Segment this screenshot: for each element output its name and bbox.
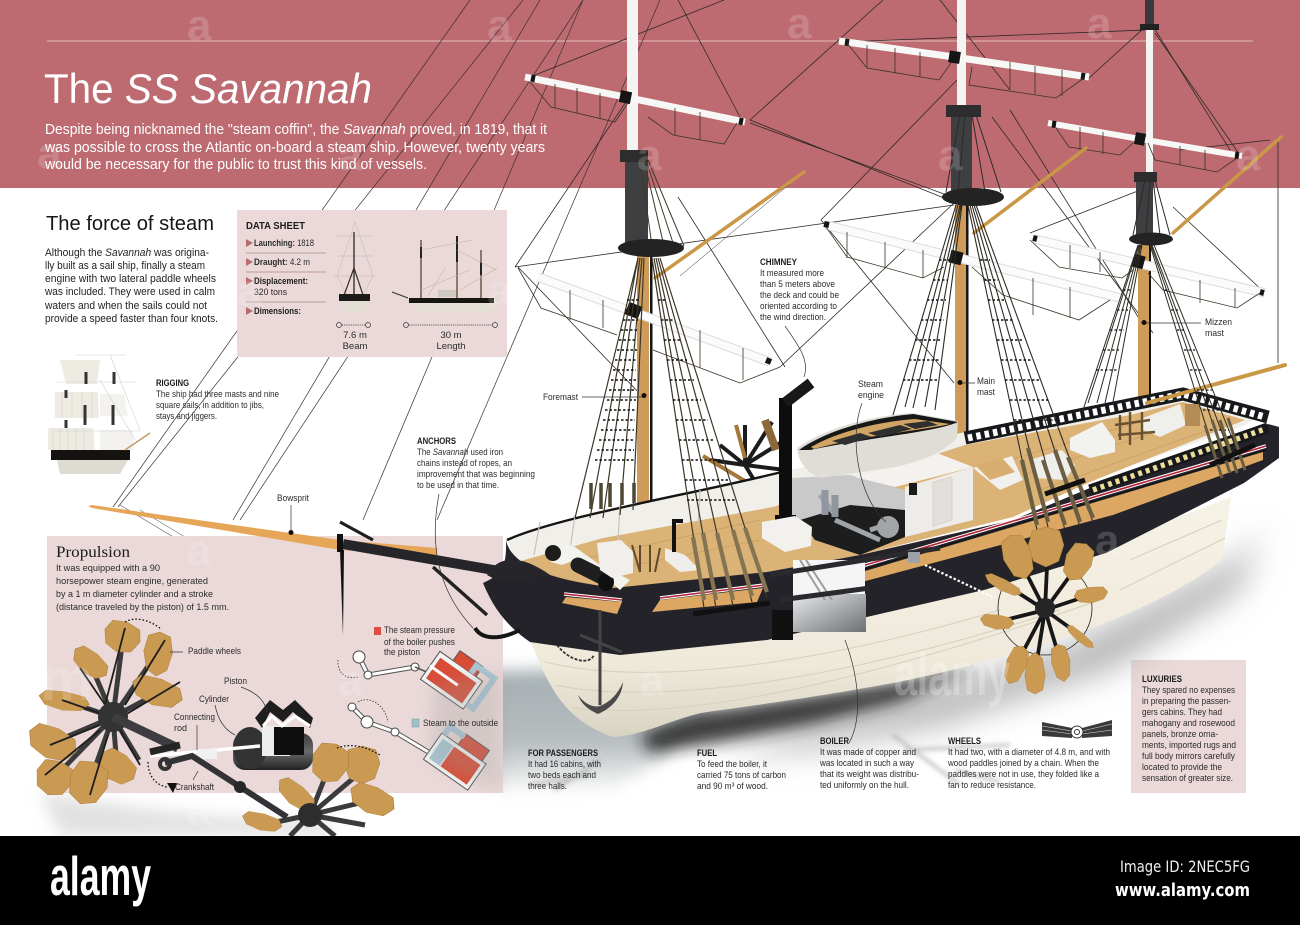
data sheet heading: DATA SHEET (246, 220, 306, 232)
callout: chimney: than 5 meters above (760, 279, 835, 290)
label: main mast: Main (977, 376, 995, 387)
watermarks: a (640, 656, 665, 705)
data rows: Draught: 4.2 m (254, 257, 310, 268)
callout: luxuries: mahogany and rosewood (1142, 718, 1235, 729)
engine cross-section diagrams (338, 642, 496, 790)
intro paragraph: was possible to cross the Atlantic on-board a steam ship. However, twenty years (44, 140, 545, 156)
callout: propulsion: horsepower steam engine, generated (56, 576, 208, 587)
intro paragraph: Despite being nicknamed the "steam coffin", the Savannah proved, in 1819, that it (45, 122, 547, 138)
near railing lattice (1090, 428, 1268, 490)
engine part labels: Paddle wheels (188, 646, 241, 657)
watermarks: m (40, 646, 93, 713)
label: mizzen mast: Mizzen (1205, 317, 1232, 328)
callout: rigging: The ship had three masts and nine (156, 389, 279, 400)
watermarks: a (338, 656, 363, 705)
dimension labels (343, 330, 466, 352)
callout: wheels: fan to reduce resistance. (948, 780, 1036, 791)
callout: luxuries: gers cabins. They had (1142, 707, 1222, 718)
data rows: Launching: 1818 (254, 238, 314, 249)
dimension labels: Length (436, 341, 466, 352)
icon: ship front view (334, 222, 376, 313)
lower yards (538, 224, 1265, 362)
ship ground shadow (480, 530, 1262, 795)
title: The SS Savannah (44, 65, 372, 112)
callout: propulsion: Propulsion (56, 544, 130, 561)
callout: chimney: the deck and could be (760, 290, 839, 301)
data rows: 320 tons (254, 287, 287, 298)
yards and footropes (518, 41, 1265, 383)
crankshaft with second paddle wheel (160, 738, 399, 836)
text: the force of steam: Although the Savannah was origina- (45, 247, 209, 259)
header rule (47, 40, 1253, 42)
callout: boiler: BOILER (820, 736, 849, 747)
footer image id: Image ID: 2NEC5FG (1120, 857, 1250, 876)
callout: for passengers (528, 748, 601, 792)
foremast (618, 0, 684, 547)
callout: anchors: chains instead of ropes, an (417, 458, 512, 469)
watermarks: a (1236, 131, 1261, 180)
far side paddle wheel (703, 420, 785, 490)
callout: fuel: and 90 m³ of wood. (697, 781, 768, 792)
exploded engine: piston and cylinder (150, 700, 313, 770)
long rigging lines fanning from the bowsprit (113, 0, 660, 640)
callout: luxuries: located to provide the (1142, 762, 1222, 773)
text: the force of steam: engine with two lateral paddle wheels (45, 273, 216, 285)
callout: luxuries: ments, imported rugs and (1142, 740, 1236, 751)
callout: boiler: ted uniformly on the hull. (820, 780, 909, 791)
paddle wheel: left exploded (22, 616, 186, 810)
callout: for passengers: three halls. (528, 781, 567, 792)
text: the force of steam: lly built as a sail ship, finally a steam (45, 260, 205, 272)
leader lines (291, 323, 1201, 743)
icon: ship side view (392, 236, 497, 312)
heading: the force of steam: The force of steam (46, 212, 214, 235)
hull wood strake and coloured stripes (562, 446, 1266, 614)
dimension labels: 30 m (440, 330, 462, 341)
callout: propulsion: (distance traveled by the piston) of 1.5 mm. (56, 602, 229, 613)
label: bowsprit: Bowsprit (277, 493, 309, 504)
leader dots (289, 320, 1147, 535)
watermarks: a (787, 0, 812, 48)
callout: fuel (697, 748, 786, 792)
legend: steam pressure (374, 625, 455, 658)
callout: wheels: paddles were not in use, they folded like a (948, 769, 1100, 780)
label: steam engine (858, 379, 884, 401)
legend: steam to the outside: Steam to the outside (423, 718, 498, 729)
panel: luxuries background (1131, 660, 1246, 793)
callout: propulsion: by a 1 m diameter cylinder and a stroke (56, 589, 213, 600)
icon: rigged ship illustration (48, 355, 150, 474)
callout: luxuries: panels, bronze orna- (1142, 729, 1218, 740)
callout: anchors: ANCHORS (417, 436, 456, 447)
label: foremast: Foremast (543, 392, 578, 403)
panel: data sheet (237, 210, 507, 357)
callout: luxuries: in preparing the passen- (1142, 696, 1231, 707)
lifeboat (797, 413, 958, 478)
callout: boiler: that its weight was distribu- (820, 769, 919, 780)
lower footropes (518, 227, 1260, 383)
shrouds and ratlines (575, 205, 1245, 608)
far railing lattice (965, 394, 1268, 438)
callout: chimney: CHIMNEY (760, 257, 798, 268)
callout: for passengers: It had 16 cabins, with (528, 759, 601, 770)
callout: propulsion: It was equipped with a 90 (56, 563, 160, 574)
watermarks: a (487, 1, 512, 50)
callout: luxuries: full body mirrors carefully (1142, 751, 1235, 762)
bow stem fittings (487, 560, 550, 582)
callout: propulsion (56, 544, 229, 613)
text: the force of steam (44, 247, 218, 325)
rigging: stays between masts and yards (515, 0, 1278, 397)
upper footropes (530, 43, 1237, 172)
watermarks: a (1095, 516, 1120, 565)
label: steam engine: Steam (858, 379, 883, 390)
callout: luxuries (1142, 674, 1236, 784)
callout: wheels: wood paddles joined by a chain. When the (947, 758, 1099, 769)
callout: luxuries: sensation of greater size. (1142, 773, 1233, 784)
label: main mast: mast (977, 387, 995, 398)
foremast shrouds (575, 258, 767, 608)
dimension labels: 7.6 m (343, 330, 367, 341)
watermarks: a (487, 266, 512, 315)
callout: fuel: To feed the boiler, it (697, 759, 767, 770)
text: the force of steam: provide a speed faster than four knots. (45, 313, 218, 325)
callout: luxuries: LUXURIES (1142, 674, 1182, 685)
right panel shadow overlay (430, 670, 503, 790)
hull white planking (530, 497, 1231, 737)
mainmast (942, 0, 1004, 485)
engine part labels: Crankshaft (175, 782, 214, 793)
cutaway: boiler section (770, 548, 940, 640)
callout: boiler: It was made of copper and (820, 747, 916, 758)
steam engine room (792, 475, 905, 555)
dimension scales (336, 322, 498, 328)
legend: steam pressure: The steam pressure (384, 625, 455, 636)
deck hatches (973, 404, 1200, 490)
diagram: steam pressing the piston (338, 642, 496, 714)
label: steam engine: engine (858, 390, 884, 401)
data rows (246, 238, 326, 317)
engine part labels: Piston (224, 676, 247, 687)
header band (0, 0, 1300, 188)
callout: chimney: the wind direction. (760, 312, 826, 323)
callout: rigging: stays and jiggers. (156, 411, 217, 422)
spanker boom (1147, 365, 1285, 403)
callout: wheels: It had two, with a diameter of 4.8 m, and with (948, 747, 1110, 758)
intro paragraph: would be necessary for the public to trust this kind of vessels. (44, 157, 427, 173)
deckhouse (855, 453, 973, 537)
label: mizzen mast (1205, 317, 1232, 339)
legend: steam pressure: the piston (384, 647, 420, 658)
callout: fuel: carried 75 tons of carbon (697, 770, 786, 781)
watermarks: alamy (894, 641, 1010, 708)
watermarks: a (187, 1, 212, 50)
watermarks: a (37, 129, 62, 178)
callout: boiler (819, 736, 919, 791)
watermarks: a (938, 131, 963, 180)
callout: chimney: It measured more (760, 268, 824, 279)
callout: anchors: to be used in that time. (417, 480, 499, 491)
legend: steam pressure: of the boiler pushes (384, 637, 455, 648)
callout: anchors: improvement that was beginning (417, 469, 535, 480)
watermarks: a (187, 526, 212, 575)
engine part labels: Connecting (174, 712, 215, 723)
engine part labels (174, 646, 247, 793)
bow fittings: windlass and crates (545, 521, 700, 591)
callout: for passengers: FOR PASSENGERS (528, 748, 598, 759)
callout: for passengers: two beds each and (528, 770, 596, 781)
callout: anchors (417, 436, 535, 491)
callout: rigging: square sails, in addition to jibs, (156, 400, 264, 411)
crank rotation arrow (125, 619, 380, 787)
footer url: www.alamy.com (1115, 880, 1250, 901)
watermarks: a (187, 786, 212, 835)
intro paragraph (44, 122, 547, 173)
text: the force of steam: was included. They were used in calm (44, 286, 215, 298)
text: the force of steam: waters and when the sails could not (44, 300, 207, 312)
label: mizzen mast: mast (1205, 328, 1224, 339)
paddle wheel: starboard (908, 527, 1109, 694)
hull black belt (483, 424, 1279, 655)
callout: wheels: WHEELS (948, 736, 981, 747)
chimney (762, 383, 812, 552)
upper yards (525, 41, 1242, 156)
panel: propulsion background (47, 536, 503, 793)
callout: wheels (947, 736, 1110, 791)
mizzen shrouds (1082, 245, 1245, 478)
stern wood grating at mizzen (1115, 412, 1155, 445)
callout: rigging (156, 378, 279, 422)
callout: rigging: RIGGING (156, 378, 189, 389)
crank arrow head (167, 783, 177, 793)
mainmast shrouds (893, 205, 1093, 530)
callout: luxuries: They spared no expenses (1142, 685, 1235, 696)
label: main mast (977, 376, 995, 398)
far bulwark and deck (507, 388, 1268, 590)
watermarks: a (1087, 0, 1112, 48)
watermarks: a (637, 131, 662, 180)
callout: chimney (760, 257, 839, 323)
mizzen mast (1129, 0, 1173, 435)
engine part leaders (170, 652, 267, 780)
anchor (557, 610, 623, 714)
footer bar (0, 836, 1300, 925)
footer logo: alamy (50, 845, 151, 907)
callout: anchors: The Savannah used iron (417, 447, 503, 458)
engine part labels: rod (174, 723, 187, 734)
callout: chimney: oriented according to (760, 301, 837, 312)
data rows: Displacement: (254, 276, 308, 287)
callout: fuel: FUEL (697, 748, 717, 759)
icon: folded paddle wheel (1042, 720, 1112, 738)
channel bars (693, 445, 1255, 614)
engine part labels: Cylinder (199, 694, 229, 705)
watermarks: a (237, 266, 262, 315)
data rows: Dimensions: (254, 306, 301, 317)
callout: boiler: was located in such a way (819, 758, 914, 769)
paddle wheel ground shadow (40, 792, 330, 836)
watermarks: a (338, 131, 363, 180)
diagram: steam to the outside (348, 700, 494, 790)
bowsprit (88, 505, 520, 637)
gaff spars (655, 137, 1281, 278)
dimension labels: Beam (343, 341, 367, 352)
